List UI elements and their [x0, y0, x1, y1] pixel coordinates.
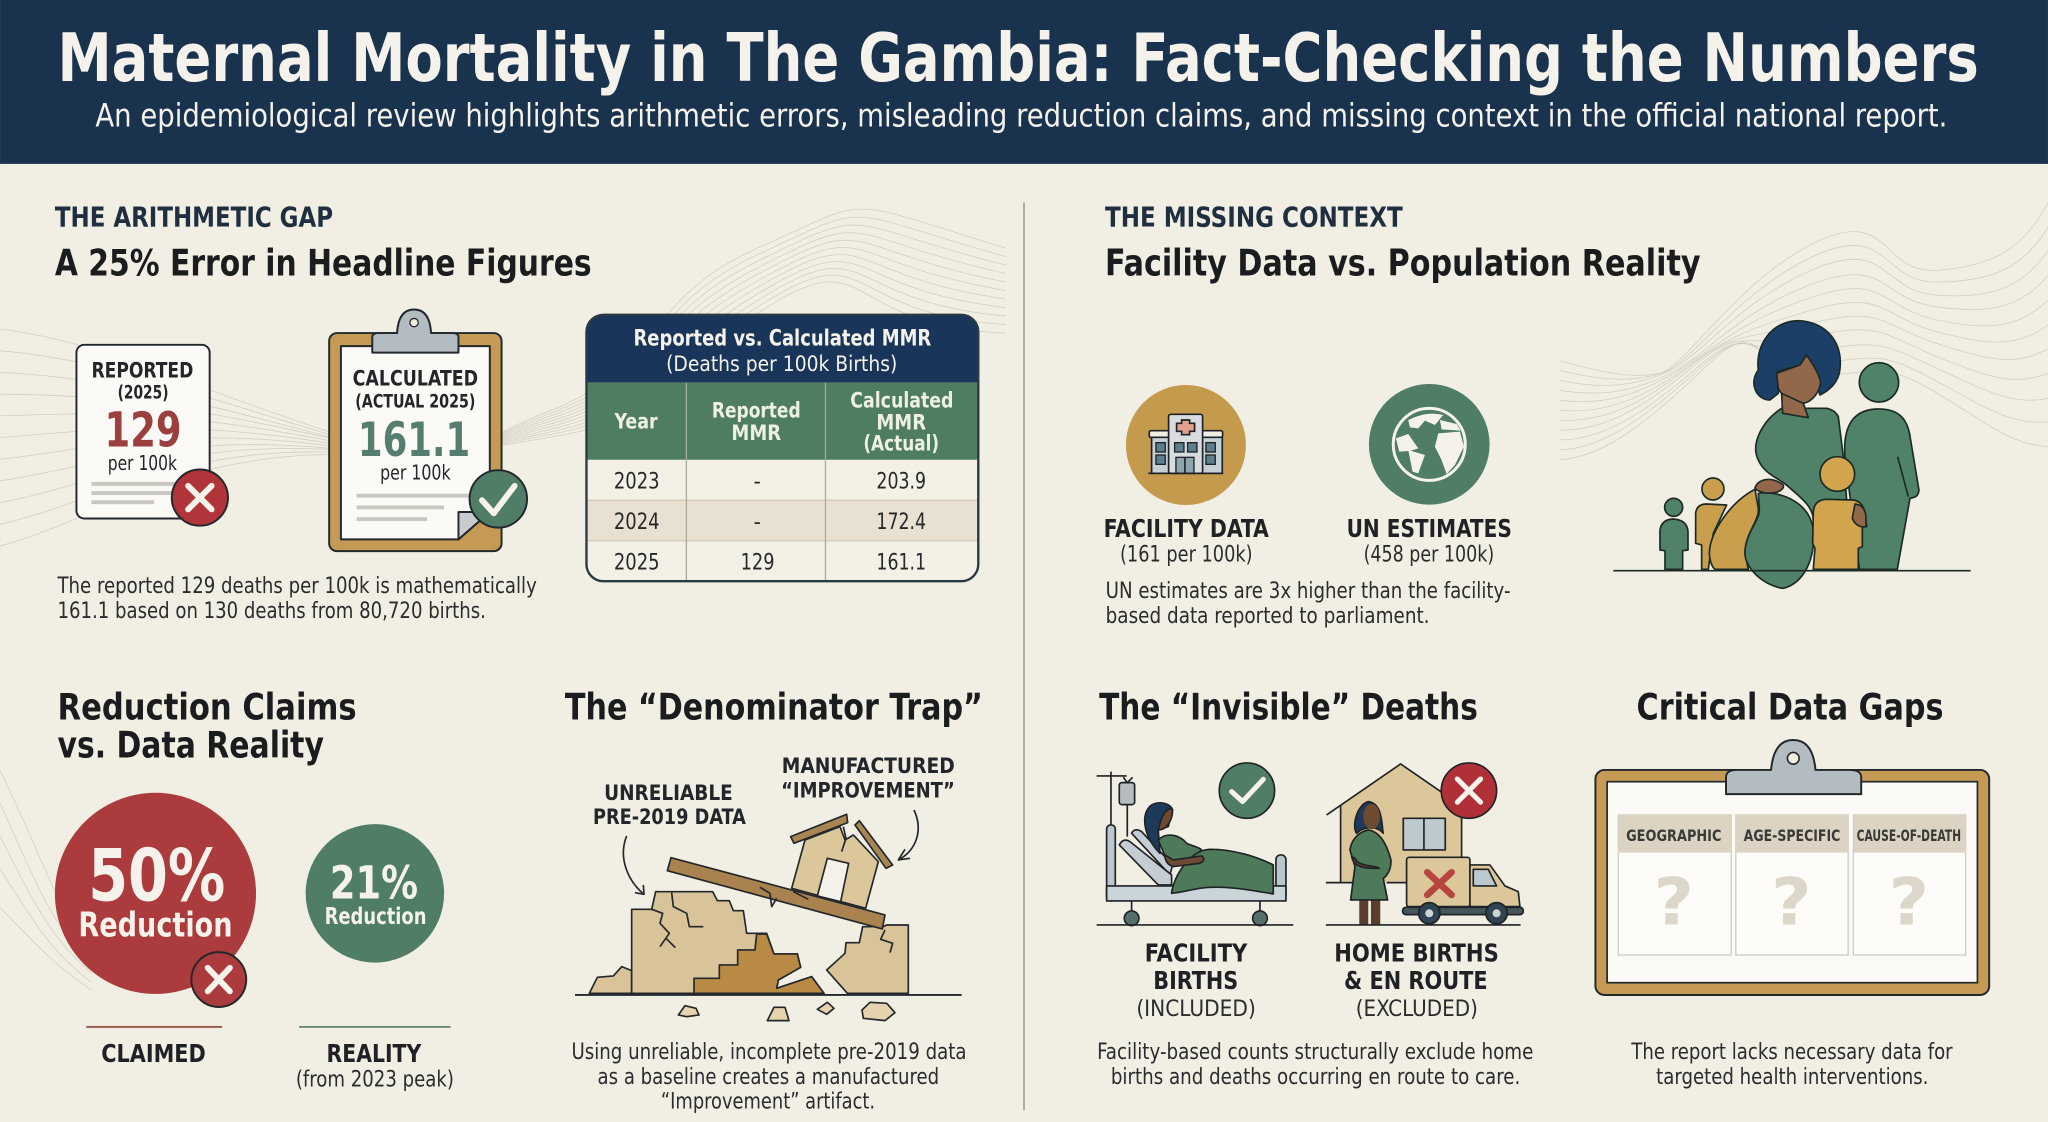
- table: reported vs calculated MMR: 2023: [614, 468, 660, 494]
- text: denominator explanation: as a baseline creates a manufactured: [598, 1064, 939, 1090]
- heading: 25% error: A 25% Error in Headline Figures: [55, 242, 592, 285]
- illustration: data gaps clipboard: [1595, 740, 1989, 995]
- heading: reduction claims: Reduction Claims: [58, 685, 357, 728]
- kicker: the missing context: THE MISSING CONTEXT: [1105, 203, 1403, 234]
- text: UN estimates explanation: [1106, 578, 1511, 629]
- kicker: the arithmetic gap: THE ARITHMETIC GAP: [55, 203, 333, 234]
- heading: critical data gaps: Critical Data Gaps: [1637, 685, 1943, 728]
- column: age-specific: [1736, 815, 1848, 955]
- heading: invisible deaths: The “Invisible” Deaths: [1099, 685, 1478, 728]
- table: reported vs calculated MMR: (Actual): [863, 432, 939, 456]
- label: home births: & EN ROUTE: [1344, 966, 1488, 995]
- label: reality: [296, 1026, 454, 1093]
- icon: reported paper card: (2025): [118, 382, 169, 403]
- text: denominator explanation: [571, 1039, 967, 1114]
- column: geographic: [1618, 815, 1731, 955]
- label: reality: REALITY: [327, 1039, 422, 1068]
- label: facility data: FACILITY DATA: [1104, 514, 1270, 543]
- illustration: home and van with pregnant woman: [1326, 764, 1523, 925]
- text: denominator explanation: “Improvement” artifact.: [661, 1088, 875, 1114]
- column: cause-of-death: ?: [1889, 865, 1929, 941]
- text: data gaps explanation: targeted health interventions.: [1656, 1064, 1928, 1090]
- table: reported vs calculated MMR: 161.1: [876, 549, 926, 575]
- column: age-specific: AGE-SPECIFIC: [1744, 826, 1840, 845]
- text: arithmetic explanation: 161.1 based on 130 deaths from 80,720 births.: [58, 598, 486, 624]
- illustration: collapsed foundation: [575, 810, 962, 1021]
- table: reported vs calculated MMR: MMR: [876, 411, 927, 435]
- label: home births: (EXCLUDED): [1356, 996, 1478, 1022]
- label: home births: HOME BIRTHS: [1334, 939, 1499, 968]
- column: cause-of-death: CAUSE-OF-DEATH: [1857, 826, 1961, 845]
- label: facility births: BIRTHS: [1153, 966, 1238, 995]
- table: reported vs calculated MMR: [586, 315, 978, 581]
- circle: 50% reduction claimed: [55, 793, 256, 1007]
- panel: missing context: [1104, 203, 1971, 629]
- icon: red cross: [1441, 763, 1497, 818]
- column: geographic: GEOGRAPHIC: [1626, 826, 1721, 845]
- table: reported vs calculated MMR: Calculated: [850, 388, 953, 412]
- column: geographic: ?: [1654, 865, 1694, 941]
- circle: 21% reduction reality: Reduction: [325, 902, 426, 930]
- text: arithmetic explanation: [57, 573, 537, 624]
- icon: calculated clipboard: CALCULATED: [353, 366, 478, 390]
- label: reality: (from 2023 peak): [296, 1067, 454, 1093]
- table: reported vs calculated MMR: 2025: [614, 549, 660, 575]
- label: facility data: (161 per 100k): [1120, 542, 1253, 568]
- table: reported vs calculated MMR: 172.4: [876, 509, 926, 535]
- label: manufactured improvement: [781, 754, 955, 804]
- heading: denominator trap: The “Denominator Trap”: [565, 685, 983, 728]
- heading: reduction claims: [58, 685, 357, 766]
- label: unreliable data: PRE-2019 DATA: [593, 805, 746, 830]
- icon: reported paper card: REPORTED: [91, 358, 193, 382]
- text: UN estimates explanation: based data reported to parliament.: [1106, 603, 1430, 629]
- panel: denominator trap: [565, 685, 983, 1114]
- table: reported vs calculated MMR: -: [754, 509, 761, 535]
- text: data gaps explanation: The report lacks necessary data for: [1630, 1039, 1953, 1065]
- label: unreliable data: [593, 781, 746, 830]
- label: claimed: CLAIMED: [101, 1039, 206, 1068]
- label: manufactured improvement: MANUFACTURED: [782, 754, 955, 779]
- icon: reported paper card: per 100k: [108, 451, 177, 475]
- panel: critical data gaps: [1595, 685, 1989, 1090]
- text: data gaps explanation: [1630, 1039, 1953, 1090]
- icon: reported paper card: [76, 345, 228, 526]
- column: age-specific: ?: [1771, 865, 1812, 941]
- table: reported vs calculated MMR: -: [754, 468, 761, 494]
- table: reported vs calculated MMR: Year: [614, 409, 658, 433]
- text: UN estimates explanation: UN estimates are 3x higher than the facility-: [1106, 578, 1511, 604]
- heading: reduction claims: vs. Data Reality: [58, 723, 324, 766]
- panel: the arithmetic gap: [55, 203, 978, 624]
- icon: reported paper card: 129: [105, 403, 182, 459]
- icon: calculated clipboard: (ACTUAL 2025): [355, 390, 475, 412]
- table: reported vs calculated MMR: Reported vs. Calculated MMR: [633, 326, 931, 352]
- label: home births: [1334, 939, 1499, 1022]
- label: facility births: [1136, 939, 1256, 1022]
- table: reported vs calculated MMR: MMR: [731, 421, 782, 445]
- icon: green check: [1219, 763, 1275, 818]
- panel: invisible deaths: [1097, 685, 1533, 1090]
- circle: 21% reduction reality: [306, 824, 444, 963]
- icon: calculated clipboard: [329, 310, 527, 551]
- label: facility data: [1104, 514, 1270, 568]
- illustration: hospital bed with patient: [1097, 772, 1293, 926]
- circle: 21% reduction reality: 21%: [330, 856, 418, 909]
- text: denominator explanation: Using unreliable, incomplete pre-2019 data: [571, 1039, 967, 1065]
- table: reported vs calculated MMR: 203.9: [876, 468, 926, 494]
- panel: reduction claims: [55, 685, 454, 1093]
- column: cause-of-death: [1853, 815, 1966, 955]
- label: facility births: (INCLUDED): [1136, 996, 1256, 1022]
- label: unreliable data: UNRELIABLE: [604, 781, 733, 806]
- text: arithmetic explanation: The reported 129 deaths per 100k is mathematically: [57, 573, 537, 599]
- label: UN estimates: (458 per 100k): [1364, 542, 1494, 568]
- icon: globe in green circle: [1369, 384, 1490, 505]
- icon: calculated clipboard: per 100k: [380, 460, 451, 484]
- icon: hospital in gold circle: [1126, 385, 1246, 505]
- illustration: family group: [1613, 321, 1971, 588]
- heading: facility vs population: Facility Data vs. Population Reality: [1105, 242, 1701, 285]
- circle: 50% reduction claimed: Reduction: [78, 905, 233, 945]
- table: reported vs calculated MMR: (Deaths per 100k Births): [666, 352, 897, 377]
- table: reported vs calculated MMR: Reported: [712, 398, 801, 422]
- circle: 50% reduction claimed: 50%: [88, 834, 225, 918]
- table: reported vs calculated MMR: 2024: [614, 509, 660, 535]
- label: UN estimates: UN ESTIMATES: [1347, 514, 1512, 543]
- label: facility births: FACILITY: [1145, 939, 1248, 968]
- icon: calculated clipboard: 161.1: [358, 413, 470, 468]
- text: invisible deaths explanation: births and deaths occurring en route to care.: [1111, 1064, 1520, 1090]
- text: invisible deaths explanation: [1097, 1039, 1533, 1090]
- text: invisible deaths explanation: Facility-based counts structurally exclude home: [1097, 1039, 1533, 1065]
- header banner: [0, 0, 2048, 164]
- label: claimed: [86, 1026, 222, 1068]
- label: UN estimates: [1347, 514, 1512, 568]
- table: reported vs calculated MMR: 129: [741, 549, 775, 575]
- label: manufactured improvement: “IMPROVEMENT”: [781, 779, 955, 804]
- subtitle: An epidemiological review highlights arithmetic errors, misleading reduction claims, and missing context in the official national report.: [95, 97, 1947, 135]
